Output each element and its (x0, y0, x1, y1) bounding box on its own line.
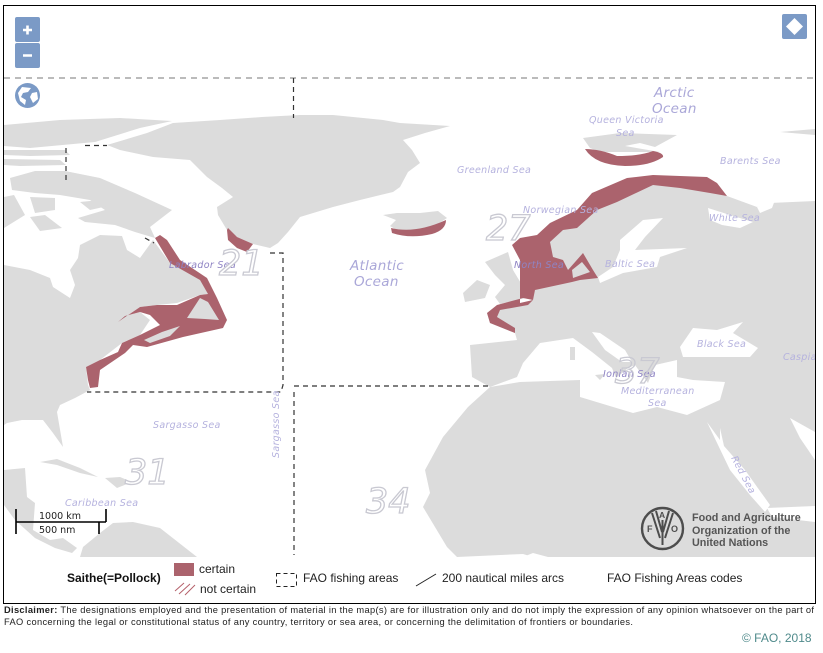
Mediterranean Sea (490, 338, 725, 415)
sea labels: Sargasso Sea (271, 390, 282, 458)
zoom controls (15, 17, 40, 68)
logo wordmark (692, 512, 801, 549)
Persian Gulf (790, 418, 815, 460)
logo emblem (642, 508, 683, 549)
Greenland (107, 115, 450, 248)
species range: certain (86, 149, 727, 388)
legend: certain: certain (199, 562, 235, 576)
sea labels (65, 85, 817, 509)
sea labels: Sargasso Sea (153, 420, 221, 431)
FAO fishing area boundaries (4, 78, 815, 555)
logo wordmark: Food and Agriculture (692, 512, 801, 524)
seas cut out of the land (490, 200, 815, 557)
sea labels: Atlantic (349, 258, 404, 274)
logo emblem: F (647, 524, 653, 534)
sea labels: White Sea (709, 213, 760, 224)
range: north-west Atlantic (86, 235, 227, 388)
legend: FAO fishing areas: FAO fishing areas (303, 571, 398, 585)
disclaimer (4, 605, 814, 627)
logo wordmark: Organization of the (692, 525, 790, 537)
sea labels: Baltic Sea (605, 259, 655, 270)
sea labels: Mediterranean (621, 386, 695, 397)
Jutland (572, 262, 590, 278)
range: south Greenland (227, 228, 253, 252)
scale bar: 1000 km (39, 511, 81, 522)
range: Svalbard (585, 149, 663, 166)
sea labels: Ocean (354, 274, 399, 290)
sea labels: Arctic (653, 85, 695, 101)
land masses (4, 115, 815, 557)
sea labels: Ocean (652, 101, 697, 117)
Novaya Zemlya (780, 129, 815, 135)
sea labels: Queen Victoria (589, 115, 664, 126)
sea labels: Ionian Sea (603, 369, 656, 380)
sea labels: Black Sea (697, 339, 746, 350)
Iceland (383, 211, 447, 232)
Adriatic Sea (592, 332, 632, 362)
Eurasia and Africa (423, 177, 815, 557)
Svalbard (583, 133, 677, 152)
legend: not certain (175, 582, 256, 596)
Gulf of Aden (767, 506, 815, 522)
range: south Iceland (391, 220, 446, 236)
legend (67, 562, 742, 596)
range: Norway, North Sea, Channel (487, 175, 727, 333)
FAO area codes: 31 (125, 453, 170, 493)
legend: 200 nautical miles arcs: 200 nautical miles arcs (442, 571, 564, 585)
FAO area codes (125, 209, 660, 522)
FAO area codes: 34 (366, 482, 411, 522)
icon: full extent (782, 14, 807, 39)
copyright: © FAO, 2018 (742, 631, 812, 645)
Baffin Island (10, 171, 172, 238)
sea labels: Norwegian Sea (523, 205, 599, 216)
Central America (4, 468, 77, 553)
Baltic Sea (598, 218, 687, 283)
logo wordmark: United Nations (692, 537, 768, 549)
sea labels: Caribbean Sea (65, 498, 138, 509)
FAO area codes: 37 (615, 352, 660, 392)
Gulf of Guinea notch (523, 553, 548, 557)
FAO area codes: 27 (486, 209, 531, 249)
Black Sea (680, 322, 758, 357)
legend: certain (174, 562, 235, 576)
Canadian Arctic islands (4, 118, 172, 166)
Caribbean islands (40, 459, 132, 488)
FAO logo (642, 508, 801, 549)
legend title: Saithe(=Pollock) (67, 571, 161, 585)
FAO area codes: 21 (219, 244, 264, 284)
sea labels: Sea (616, 128, 635, 139)
logo emblem: A (659, 510, 665, 520)
sea labels: Labrador Sea (169, 260, 236, 271)
Red Sea (707, 422, 770, 512)
northern Canada islands (4, 195, 108, 231)
Newfoundland (187, 298, 219, 320)
Great Britain (485, 252, 530, 304)
Barents coast inlet (757, 200, 775, 213)
North America mainland (4, 235, 208, 447)
disclaimer: Disclaimer: The designations employed and the presentation of material in the map(s) are for illustration only and do not imply the expression of any opinion whatsoever on the part of (4, 605, 814, 615)
sea labels: Caspia (783, 352, 817, 363)
sea labels: North Sea (514, 260, 564, 271)
sea labels: Red Sea (728, 454, 757, 496)
Ireland (463, 280, 490, 302)
White Sea (708, 208, 753, 228)
Mediterranean islands (570, 347, 605, 380)
scale bar: 500 nm (39, 525, 75, 536)
icon: globe (15, 83, 40, 108)
South America (80, 522, 197, 557)
logo emblem: O (671, 524, 678, 534)
scale bar (16, 509, 106, 536)
legend: FAO Fishing Areas codes: FAO Fishing Areas codes (607, 571, 742, 585)
sea labels: Greenland Sea (457, 165, 531, 176)
Nova Scotia (144, 326, 180, 343)
sea labels: Sea (648, 398, 667, 409)
legend: not certain: not certain (200, 582, 256, 596)
sea labels: Barents Sea (720, 156, 781, 167)
disclaimer: FAO concerning the legal or constitutional status of any country, territory or sea area, or concerning the delimitation of frontiers or boundaries. (4, 617, 633, 627)
